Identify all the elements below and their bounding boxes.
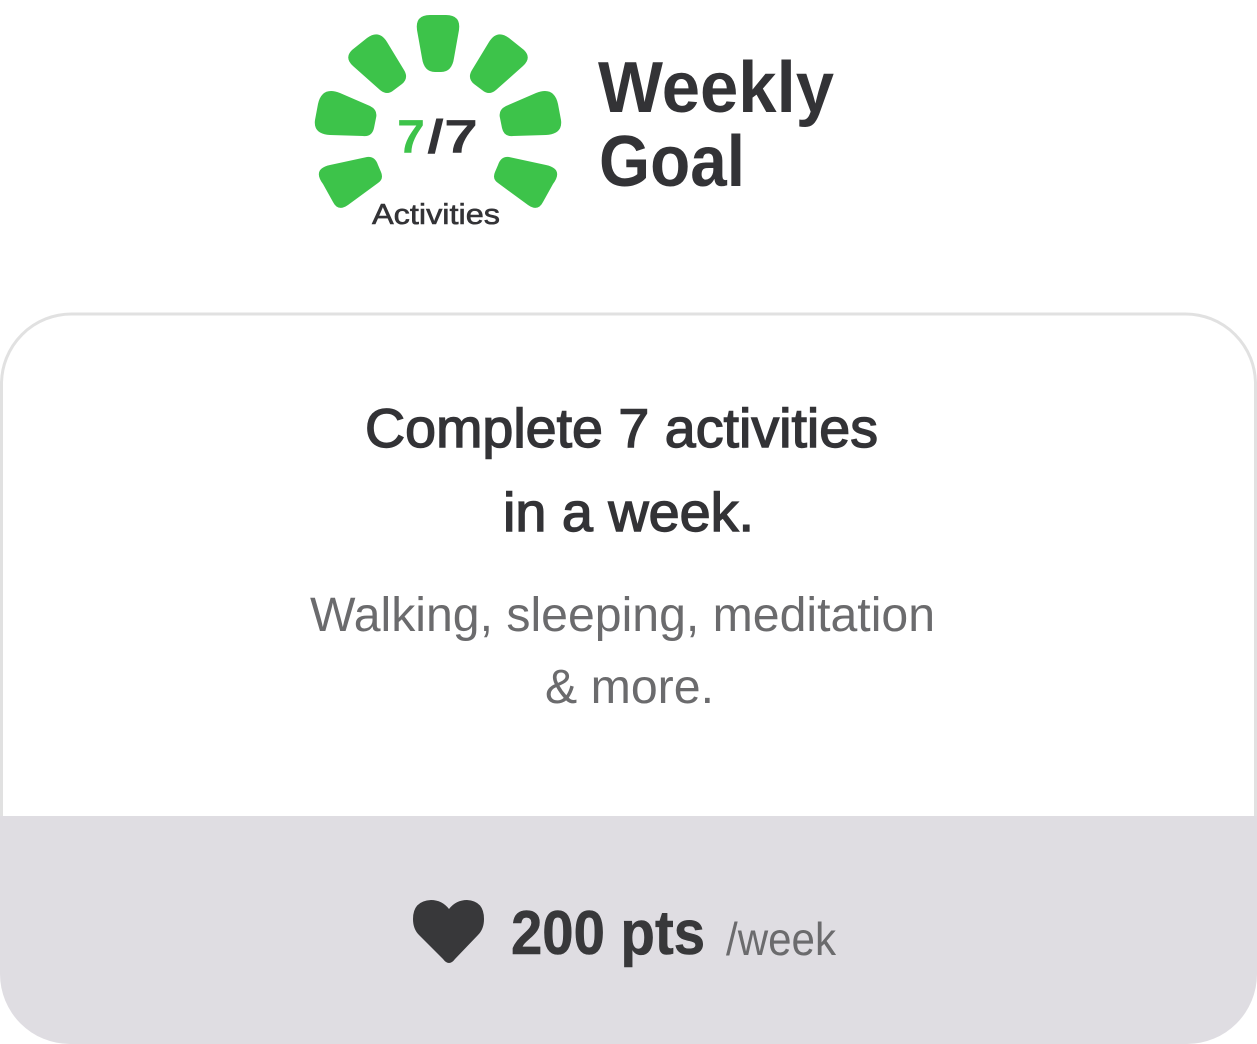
points value: 200 pts [511, 899, 705, 968]
progress ring icon: 7 of 7 activities: /7 [427, 110, 478, 163]
title: Weekly [598, 48, 834, 128]
ring count: 7/7: 7 [397, 110, 425, 163]
card heading [365, 397, 878, 543]
panel: goal card [0, 314, 1257, 1044]
card footer band [0, 816, 1257, 1044]
points period: /week [726, 913, 837, 965]
icon: heart [413, 900, 484, 963]
card description [310, 589, 935, 714]
ring caption: Activities [372, 199, 500, 231]
title [598, 48, 834, 202]
card heading: Complete 7 activities [365, 397, 878, 459]
progress ring icon: 7 of 7 activities [315, 15, 561, 231]
card heading: in a week. [503, 481, 754, 543]
ring segments [315, 15, 561, 208]
title: Goal [599, 122, 745, 202]
card description: Walking, sleeping, meditation [310, 589, 935, 642]
card description: & more. [545, 661, 714, 714]
card outline [2, 314, 1256, 816]
